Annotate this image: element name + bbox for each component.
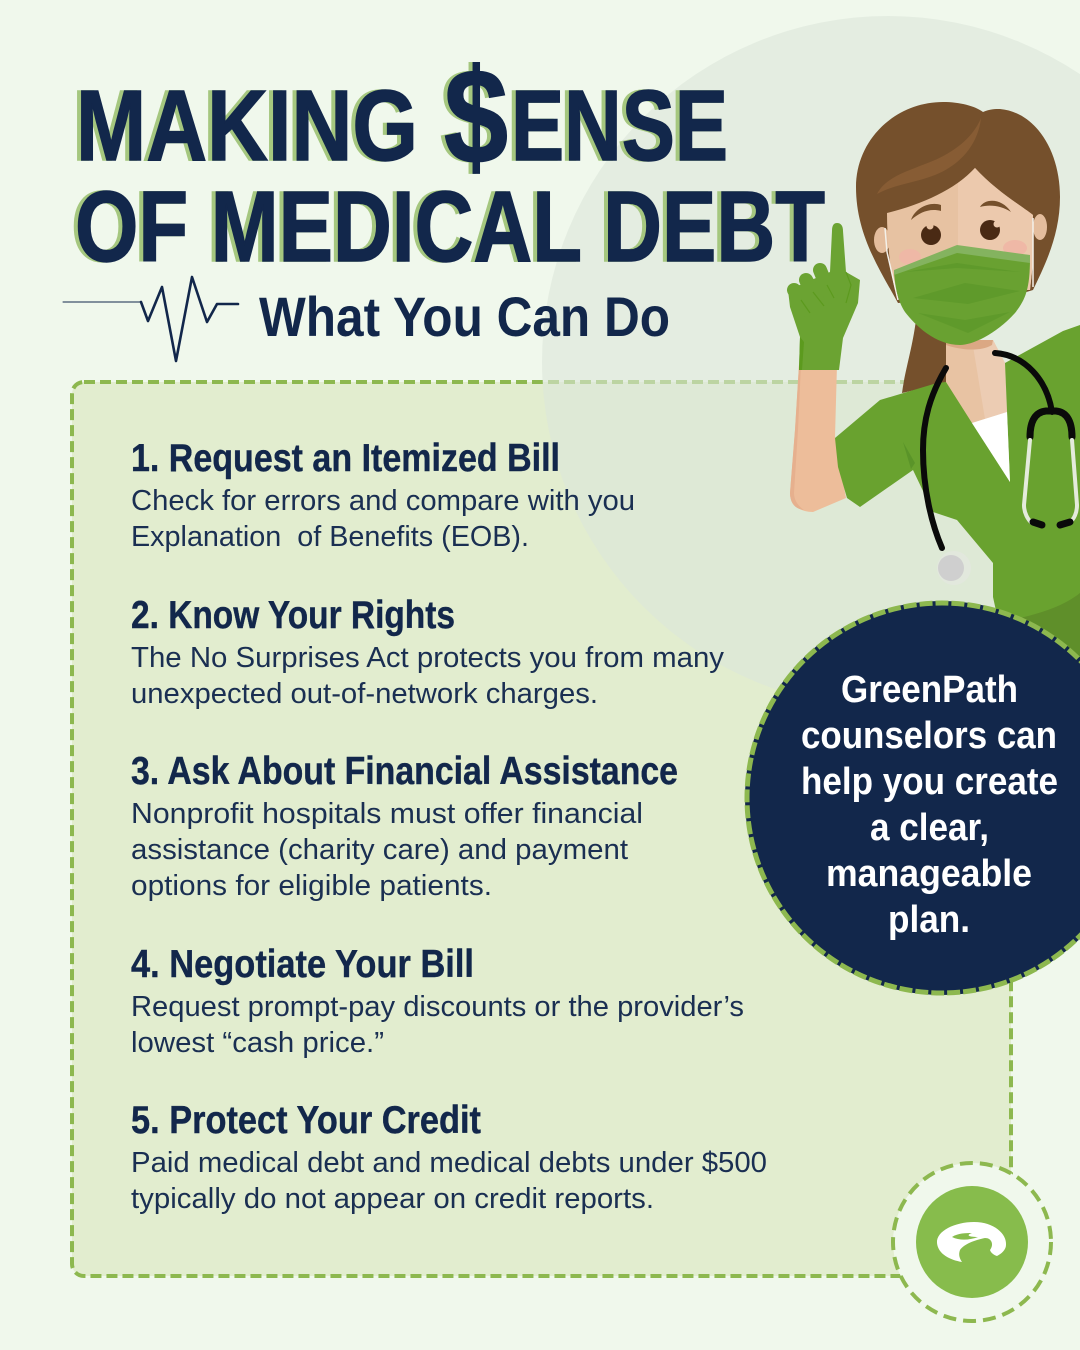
callout: GreenPath counselors: [745, 601, 1080, 995]
panel: action steps background: [72, 382, 1011, 1276]
raised arm: [790, 365, 846, 512]
callout: GreenPath counselors: GreenPath: [841, 669, 1018, 711]
white undershirt: [972, 412, 1010, 482]
step 3: 3. Ask About Financial Assistance: [131, 750, 678, 793]
title: [71, 41, 825, 283]
title line 1: MAKING: [76, 70, 418, 182]
eyebrows: [911, 201, 1011, 220]
face light side: [958, 168, 1033, 290]
step 2: [131, 594, 724, 710]
title line 1: ENSE: [511, 70, 728, 182]
mask folds: [905, 263, 1020, 333]
step 3: options for eligible patients.: [131, 870, 492, 902]
title line 1: ENSE: [507, 70, 724, 182]
gloved hand: [788, 223, 860, 370]
step 3: Nonprofit hospitals must offer financial: [131, 798, 643, 830]
step 3: [131, 750, 678, 902]
decorative large circle behind nurse: [542, 16, 1080, 708]
subtitle: What You Can Do: [259, 285, 670, 348]
icon: heartbeat line: [63, 277, 238, 361]
mask ear loops: [885, 218, 1033, 300]
step 1: Check for errors and compare with you: [131, 485, 635, 517]
cheeks: [899, 240, 1027, 265]
step 3: assistance (charity care) and payment: [131, 834, 628, 866]
hair highlight: [877, 118, 981, 194]
title line 1: $: [440, 41, 504, 192]
step 1: Explanation of Benefits (EOB).: [131, 521, 529, 553]
step 1: [131, 437, 635, 553]
title line 2: OF MEDICAL DEBT: [71, 171, 821, 283]
neck light side: [972, 340, 1007, 419]
step 2: 2. Know Your Rights: [131, 594, 455, 637]
scrubs top: [835, 325, 1080, 720]
step 4: 4. Negotiate Your Bill: [131, 943, 474, 986]
hair: [856, 102, 1060, 303]
eyes: [921, 220, 1000, 245]
step 5: 5. Protect Your Credit: [131, 1099, 481, 1142]
title line 1: $: [444, 41, 508, 192]
callout: GreenPath counselors: manageable: [826, 853, 1032, 895]
step 4: lowest “cash price.”: [131, 1027, 384, 1059]
mask top band: [894, 245, 1030, 275]
step 4: [131, 943, 744, 1059]
callout: GreenPath counselors: counselors can: [801, 715, 1057, 757]
finger creases: [801, 272, 851, 313]
title line 2: OF MEDICAL DEBT: [75, 171, 825, 283]
ears: [874, 214, 1047, 253]
title line 1: MAKING: [72, 70, 414, 182]
callout: GreenPath counselors: a clear,: [870, 807, 989, 849]
step 4: Request prompt-pay discounts or the provider’s: [131, 991, 744, 1023]
face: [887, 168, 1033, 290]
scrubs shadow: [1020, 593, 1080, 720]
step 5: Paid medical debt and medical debts under $500: [131, 1147, 767, 1179]
callout: GreenPath counselors: plan.: [888, 899, 970, 941]
callout: GreenPath counselors: help you create: [801, 761, 1058, 803]
step 2: The No Surprises Act protects you from many: [131, 642, 724, 674]
stethoscope: [923, 353, 1077, 585]
nurse illustration: [788, 102, 1080, 720]
arm shadow: [790, 365, 804, 510]
neck: [946, 340, 1007, 423]
mask: [894, 250, 1030, 345]
title line 1: [72, 41, 728, 192]
step 5: [131, 1099, 767, 1215]
neck shadow under mask: [946, 340, 993, 350]
logo badge: [893, 1163, 1051, 1321]
step 2: unexpected out-of-network charges.: [131, 678, 598, 710]
step 5: typically do not appear on credit reports.: [131, 1183, 654, 1215]
sleeve fold: [903, 442, 915, 469]
ponytail hair: [902, 320, 950, 393]
step 1: 1. Request an Itemized Bill: [131, 437, 560, 480]
